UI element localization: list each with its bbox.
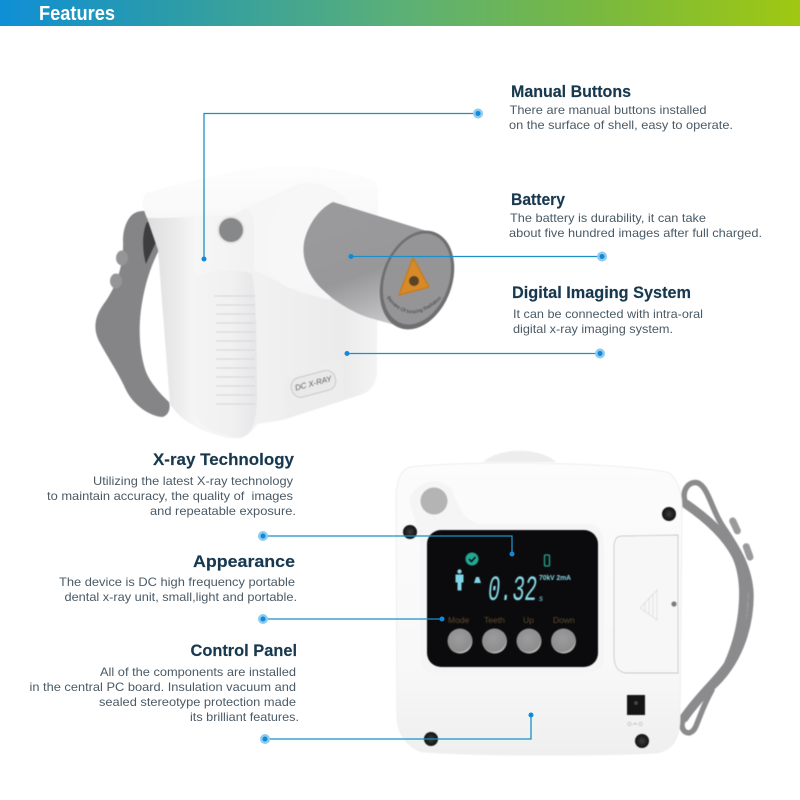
description: All of the components are installed bbox=[100, 665, 296, 679]
callout: Control Panel bbox=[30, 641, 534, 744]
power button bbox=[420, 488, 448, 514]
heading: Manual Buttons bbox=[511, 82, 631, 101]
panel bevel bbox=[410, 481, 604, 673]
check icon bbox=[466, 552, 478, 566]
button labels: Teeth bbox=[484, 615, 505, 625]
strap bbox=[682, 482, 751, 733]
tube end cap bbox=[367, 220, 467, 340]
header bar bbox=[0, 0, 800, 26]
heading: Control Panel bbox=[190, 641, 297, 660]
person icon bbox=[456, 569, 481, 590]
description: its brilliant features. bbox=[190, 710, 299, 724]
device photo: front view of portable x-ray unit bbox=[94, 184, 455, 438]
tooth icon bbox=[474, 577, 481, 583]
power button bbox=[217, 216, 245, 244]
leader line bbox=[204, 114, 478, 259]
button labels bbox=[448, 615, 575, 625]
power socket bbox=[627, 695, 645, 715]
body shell bbox=[143, 166, 378, 438]
heading: X-ray Technology bbox=[153, 450, 295, 469]
description: and repeatable exposure. bbox=[150, 504, 296, 518]
button labels: Down bbox=[553, 615, 575, 625]
timer readout: 0.32 bbox=[488, 571, 537, 611]
cap label bbox=[385, 295, 442, 313]
ribbed grip bbox=[190, 271, 257, 438]
wrist strap bbox=[95, 211, 170, 417]
tube collar bbox=[253, 173, 357, 299]
description: The battery is durability, it can take bbox=[510, 211, 706, 225]
screws bbox=[403, 525, 417, 539]
callout: Digital Imaging System bbox=[344, 283, 703, 358]
device photo: back view with control panel: ⊙-•-⊙ bbox=[627, 722, 643, 728]
top bump bbox=[483, 451, 556, 462]
badge: DC X-RAY bbox=[285, 359, 344, 417]
description: The device is DC high frequency portable bbox=[59, 575, 295, 589]
warning triangle bbox=[399, 258, 429, 295]
heading: Features: Features bbox=[39, 3, 115, 25]
heading: Digital Imaging System bbox=[512, 283, 691, 302]
description: to maintain accuracy, the quality of images bbox=[47, 489, 293, 503]
device photo: front view of portable x-ray unit: Beware Of Ionizing Radiation bbox=[386, 296, 442, 314]
battery icon bbox=[544, 555, 550, 566]
description: on the surface of shell, easy to operate. bbox=[509, 118, 733, 132]
description: in the central PC board. Insulation vacuum and bbox=[30, 680, 296, 694]
kV mA readout: 70kV 2mA bbox=[539, 575, 571, 582]
top surface bbox=[143, 166, 378, 240]
battery cover bbox=[614, 535, 678, 673]
x-ray tube cylinder bbox=[303, 202, 433, 325]
device photo: front view of portable x-ray unit: DC X-RAY bbox=[294, 374, 333, 393]
shell bbox=[396, 463, 682, 755]
device photo: back view with control panel bbox=[396, 451, 754, 755]
heading: Battery bbox=[511, 190, 565, 209]
description: Utilizing the latest X-ray technology bbox=[93, 474, 293, 488]
description: sealed stereotype protection made bbox=[99, 695, 296, 709]
control buttons bbox=[448, 628, 576, 654]
description: about five hundred images after full charged. bbox=[509, 226, 762, 240]
callout: Battery bbox=[348, 190, 762, 262]
callout: Appearance bbox=[59, 552, 444, 624]
callout: X-ray Technology bbox=[47, 450, 514, 556]
description: dental x-ray unit, small,light and portable. bbox=[64, 590, 297, 604]
raised tube base bbox=[246, 183, 350, 300]
strap buttons bbox=[116, 250, 128, 266]
callout: Manual Buttons bbox=[202, 82, 733, 262]
control panel screen bbox=[427, 530, 598, 667]
description: It can be connected with intra-oral bbox=[513, 307, 703, 321]
button labels: Up bbox=[523, 615, 534, 625]
description: digital x-ray imaging system. bbox=[513, 322, 673, 336]
device photo: back view with control panel: s bbox=[539, 594, 543, 603]
button labels: Mode bbox=[448, 615, 470, 625]
description: There are manual buttons installed bbox=[510, 103, 706, 117]
heading: Appearance bbox=[193, 552, 295, 571]
